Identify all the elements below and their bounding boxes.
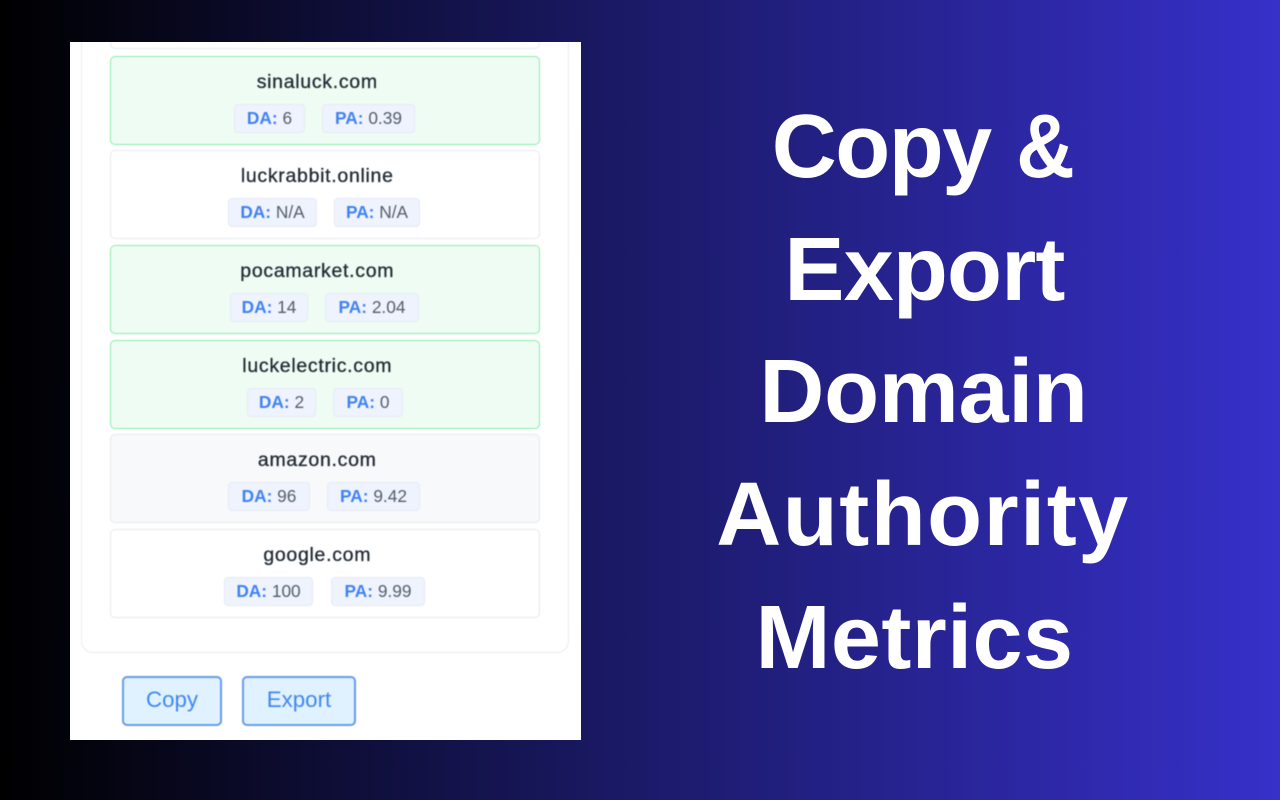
PA badge: PA: 9.42	[340, 486, 407, 506]
title	[716, 97, 1130, 688]
card: google.com	[110, 529, 540, 618]
DA badge	[230, 293, 308, 322]
cut-off card	[110, 0, 540, 49]
PA badge	[327, 482, 420, 510]
domain name: google.com	[263, 544, 371, 566]
PA badge	[331, 577, 425, 606]
PA badge	[325, 293, 419, 322]
domain name: pocamarket.com	[240, 260, 394, 282]
DA badge	[247, 388, 316, 416]
DA badge: DA: 2	[259, 392, 304, 412]
DA badge: DA: 6	[247, 108, 292, 128]
export button: Export	[267, 687, 331, 712]
title: Copy	[772, 97, 991, 197]
DA badge: DA: 14	[242, 297, 296, 317]
DA badge: DA: N/A	[240, 202, 305, 222]
PA badge: PA: N/A	[346, 202, 408, 222]
DA badge	[234, 104, 305, 132]
PA badge	[322, 104, 415, 132]
card: pocamarket.com	[110, 245, 540, 334]
PA badge	[334, 198, 420, 226]
DA badge: DA: 100	[236, 581, 301, 601]
screenshot panel	[70, 42, 581, 740]
DA badge: DA: 96	[242, 486, 296, 506]
DA badge	[228, 198, 317, 226]
PA badge: PA: 9.99	[345, 581, 411, 601]
PA badge: PA: 0	[347, 392, 389, 412]
title: Metrics	[756, 588, 1073, 688]
copy button: Copy	[146, 687, 198, 712]
DA badge	[224, 577, 313, 606]
copy button	[122, 676, 222, 726]
domain name: luckrabbit.online	[241, 164, 394, 186]
domain name: luckelectric.com	[242, 354, 392, 376]
card: luckrabbit.online	[110, 150, 540, 239]
card: amazon.com	[110, 434, 540, 523]
PA badge: PA: 2.04	[339, 297, 405, 317]
results container	[81, 0, 569, 653]
card: sinaluck.com	[110, 56, 540, 145]
title: Export	[784, 220, 1065, 320]
domain name: sinaluck.com	[257, 70, 378, 92]
domain name: amazon.com	[258, 448, 377, 470]
PA badge: PA: 0.39	[335, 108, 402, 128]
title: Authority	[716, 465, 1130, 565]
card: luckelectric.com	[110, 340, 540, 429]
title: &	[1016, 97, 1075, 197]
PA badge	[333, 388, 403, 416]
export button	[242, 676, 356, 726]
DA badge	[228, 482, 310, 510]
title: Domain	[759, 342, 1088, 442]
